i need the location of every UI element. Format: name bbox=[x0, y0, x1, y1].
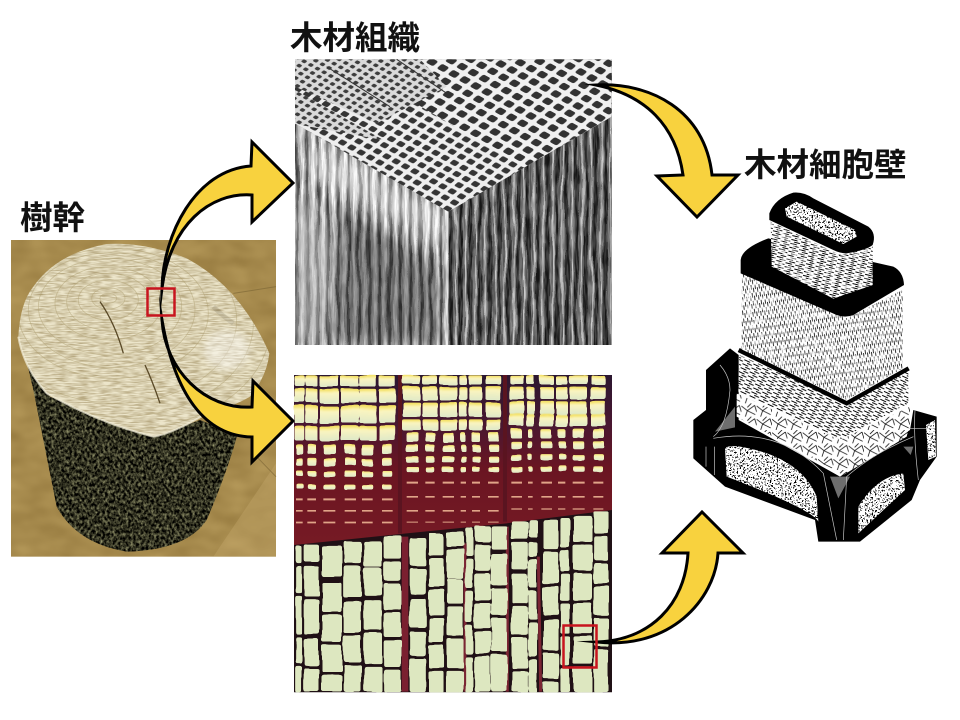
highlight square on trunk bbox=[148, 288, 174, 316]
vertical rays bbox=[400, 375, 505, 533]
heading: 樹幹: 樹幹 bbox=[20, 200, 86, 236]
middle lamella black base bbox=[693, 348, 937, 542]
photo: wood tissue electron micrograph bbox=[287, 59, 617, 350]
early wood cells bbox=[295, 375, 606, 489]
inner wall side bbox=[771, 222, 873, 299]
photo: wood cross-section micrograph bbox=[294, 375, 612, 692]
lower cells bbox=[297, 512, 608, 691]
S1 net layer bbox=[737, 393, 910, 475]
arrow: trunk to cross-section bbox=[162, 320, 293, 462]
right face bbox=[448, 117, 612, 345]
diagram: wood cell wall layers bbox=[693, 193, 937, 542]
arrow: wood tissue to cell wall bbox=[596, 85, 738, 217]
left face bbox=[295, 124, 448, 345]
heading: 木材組織: 木材組織 bbox=[290, 20, 420, 56]
white contour lines bbox=[706, 365, 935, 540]
top face cell grid bbox=[295, 59, 612, 212]
thin black band bbox=[739, 350, 909, 403]
highlight square on cross-section bbox=[564, 626, 596, 668]
lumen bbox=[785, 202, 857, 244]
heading: 木材細胞壁: 木材細胞壁 bbox=[744, 147, 907, 183]
S2 outer hatch layer bbox=[738, 355, 908, 439]
S2 main hatched wall bbox=[742, 270, 903, 400]
arrow: trunk to wood tissue bbox=[162, 142, 293, 288]
arrow: cross-section to cell wall bbox=[597, 512, 743, 643]
inner black rim bbox=[769, 193, 874, 253]
stippled lumen areas bbox=[725, 420, 936, 533]
upper black rim bbox=[741, 238, 904, 317]
grey junctions bbox=[715, 407, 913, 498]
late wood slits bbox=[296, 482, 603, 523]
photo: tree trunk stump bbox=[0, 223, 276, 557]
